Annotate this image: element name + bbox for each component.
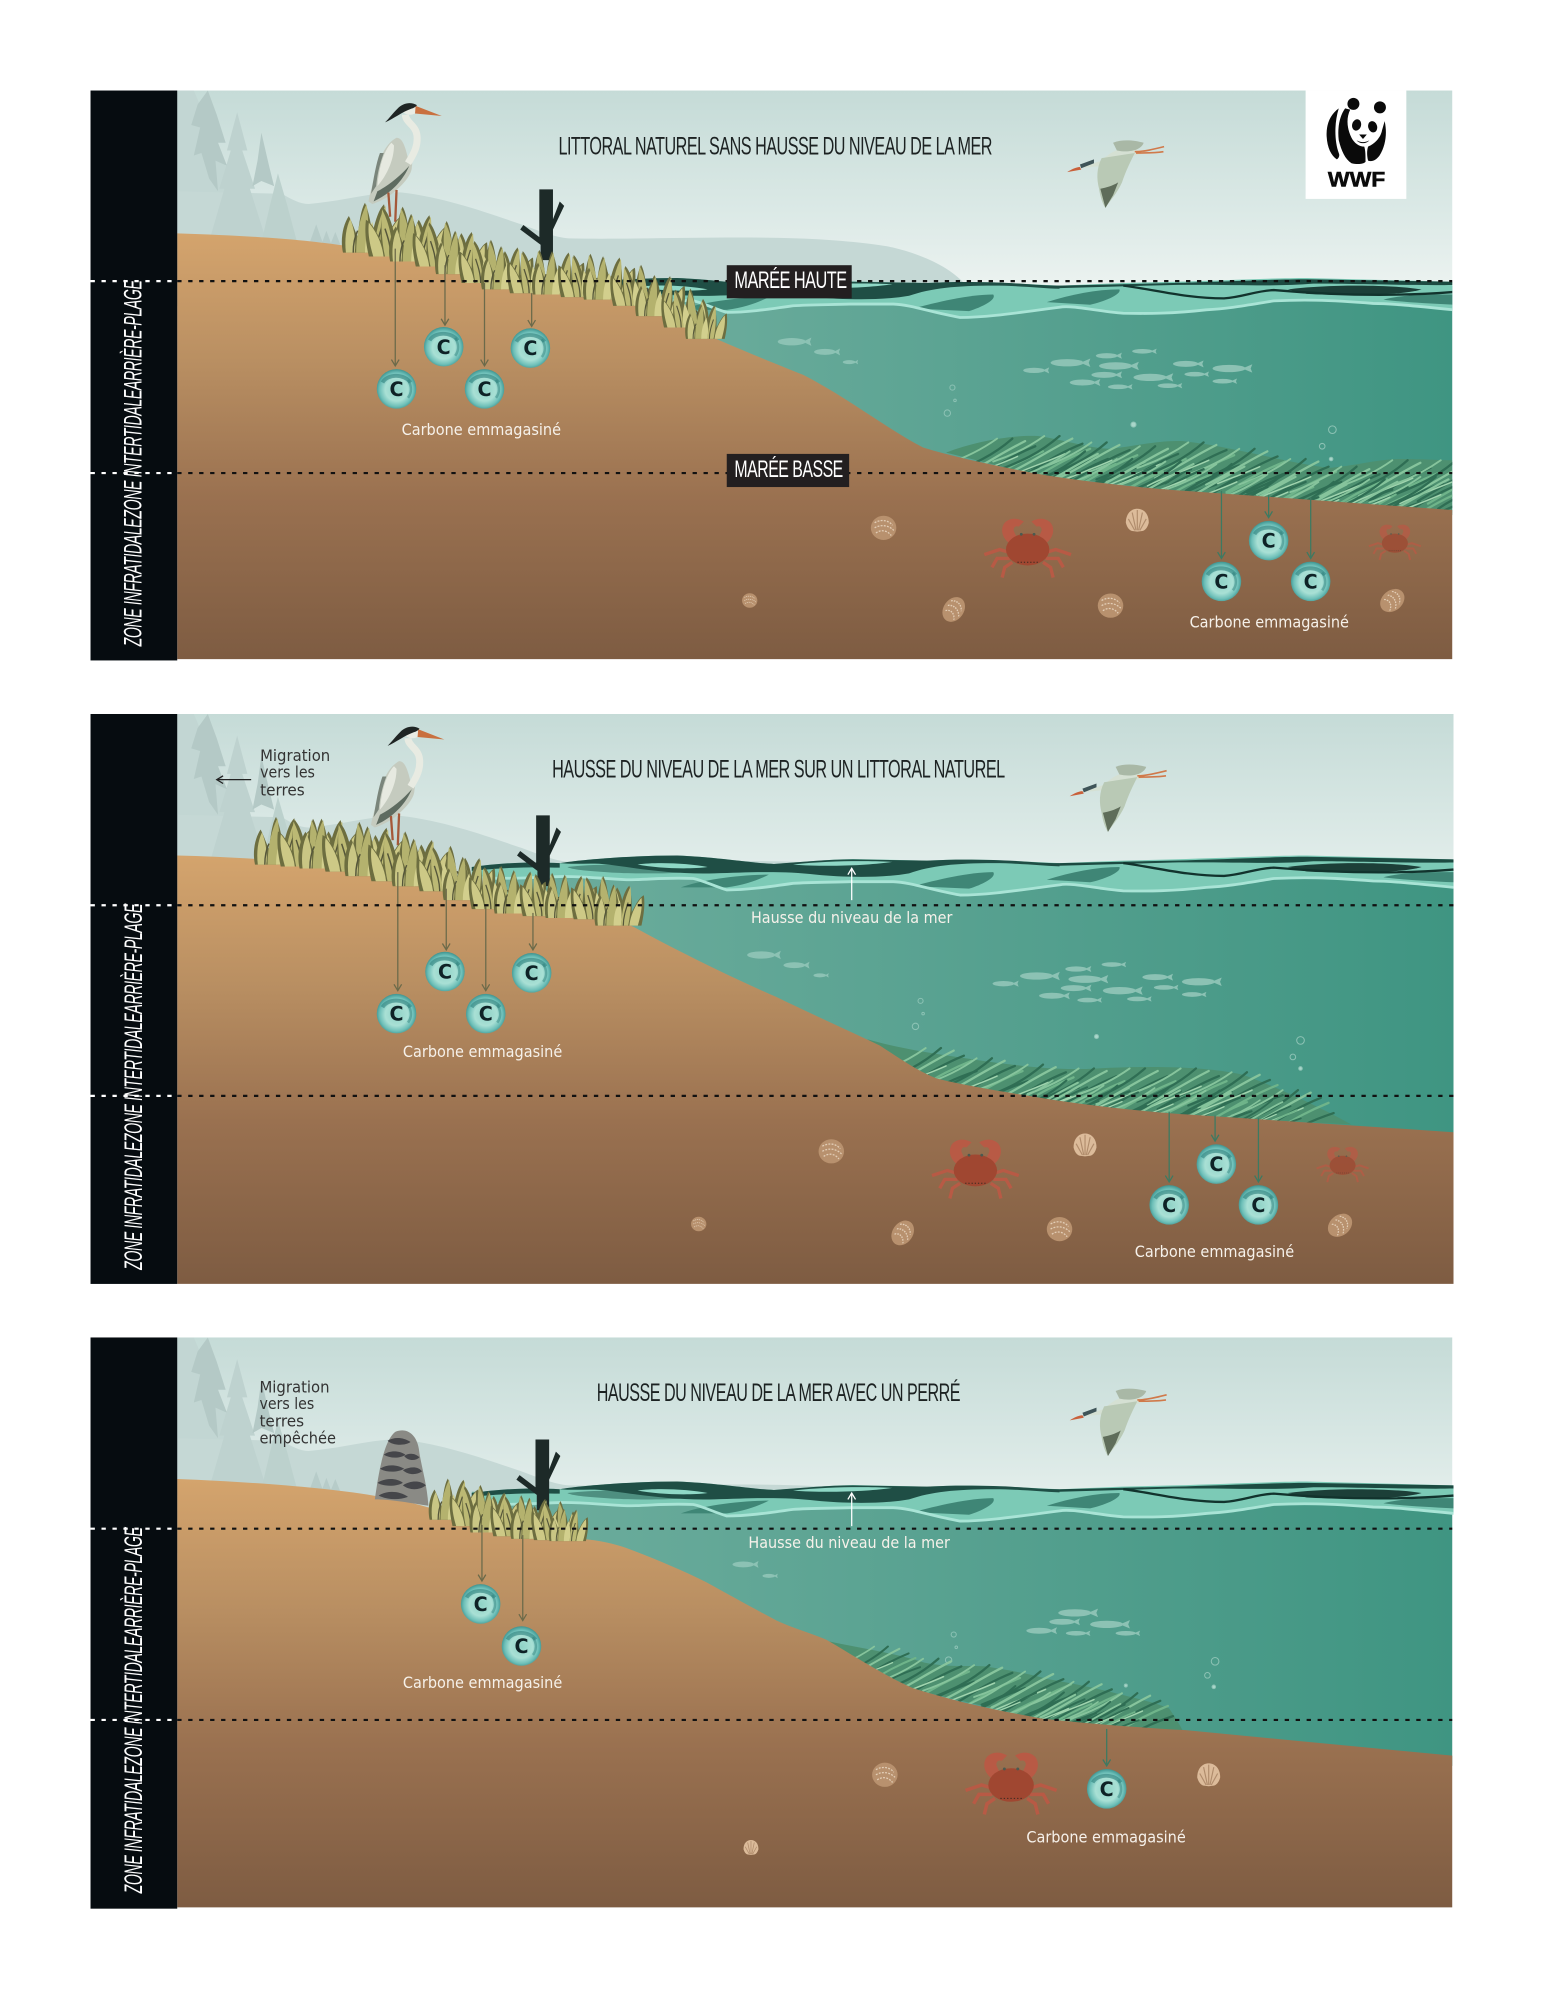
stored carbon: upper shore: C (523, 337, 537, 360)
sea creatures and shells (691, 1133, 1369, 1250)
blocked migration note: vers les (259, 1394, 314, 1413)
zone column (91, 91, 177, 660)
stored carbon: upper shore: C (474, 1593, 488, 1616)
stored carbon: upper shore: Carbone emmagasiné (402, 420, 561, 439)
zone column (91, 1337, 177, 1909)
seagrass (867, 1039, 1352, 1139)
marsh grass (429, 1479, 588, 1541)
stored carbon: upper shore: Carbone emmagasiné (403, 1673, 562, 1692)
distant hills and trees (177, 91, 964, 306)
zone column: ZONE INFRATIDALEZONE INTERTIDALEARRIÈRE-PLAGE (119, 1527, 148, 1894)
sea level rise arrow and label: Hausse du niveau de la mer (748, 1533, 950, 1552)
panel: natural shoreline without sea level rise (91, 91, 1492, 660)
stored carbon: seabed: Carbone emmagasiné (1026, 1827, 1186, 1846)
wave band (472, 1482, 1454, 1521)
panel: sea level rise with a seawall (91, 1337, 1454, 1909)
stored carbon: seabed: Carbone emmagasiné (1190, 612, 1349, 631)
wave band (472, 856, 1454, 895)
water (612, 286, 1452, 515)
fish (747, 951, 1222, 1003)
bubbles (945, 1632, 1219, 1689)
stored carbon: seabed: C (1214, 570, 1228, 593)
migration note: Migration (260, 746, 330, 765)
seabed and shore ground (177, 1479, 1452, 1907)
water (472, 1492, 1452, 1766)
flying bird (1070, 764, 1167, 832)
heron (371, 727, 444, 845)
label: low tide (727, 454, 849, 487)
seabed and shore ground (177, 856, 1454, 1284)
stored carbon: upper shore: C (438, 961, 452, 984)
stored carbon: upper shore: C (525, 962, 539, 985)
wave band (622, 278, 1452, 319)
stored carbon: seabed: Carbone emmagasiné (1135, 1242, 1294, 1261)
stored carbon: seabed: C (1304, 570, 1318, 593)
stored carbon: upper shore (377, 872, 562, 1061)
panel: sea level rise on a natural shoreline (91, 714, 1454, 1284)
stored carbon: seabed (1135, 1112, 1294, 1261)
stored carbon: upper shore: C (477, 378, 492, 401)
seawall stones (375, 1430, 428, 1506)
marsh grass (342, 203, 727, 339)
distant hills and trees (177, 1337, 964, 1553)
sea level rise arrow and label: Hausse du niveau de la mer (751, 908, 953, 927)
stored carbon: seabed (1026, 1729, 1186, 1846)
zone column: ZONE INFRATIDALEZONE INTERTIDALEARRIÈRE-PLAGE (119, 280, 148, 647)
dead tree stump (520, 189, 564, 260)
label: low tide: MARÉE BASSE (734, 456, 843, 483)
sky (177, 1337, 1452, 1554)
blocked migration note: terres (259, 1412, 304, 1431)
water (485, 867, 1454, 1136)
blocked migration note: empêchée (259, 1428, 336, 1447)
bubbles (912, 998, 1304, 1070)
distant hills and trees (177, 714, 964, 929)
seagrass (821, 1640, 1183, 1742)
dead tree stump (516, 1439, 560, 1510)
stored carbon: upper shore: Carbone emmagasiné (403, 1042, 562, 1061)
stored carbon: upper shore: C (390, 1003, 404, 1026)
title: HAUSSE DU NIVEAU DE LA MER SUR UN LITTORAL NATUREL (552, 756, 1005, 784)
fish (778, 337, 1252, 390)
stored carbon: seabed: C (1100, 1778, 1114, 1801)
zone column (91, 714, 177, 1284)
stored carbon: seabed: C (1162, 1194, 1176, 1217)
stored carbon: upper shore: C (479, 1003, 493, 1026)
stored carbon: upper shore: C (514, 1635, 528, 1658)
WWF logo: WWF (1328, 169, 1385, 192)
zone column: ZONE INFRATIDALEZONE INTERTIDALEARRIÈRE-PLAGE (119, 903, 148, 1270)
stored carbon: upper shore: C (437, 336, 451, 359)
stored carbon: upper shore (403, 1525, 562, 1692)
dead tree stump (517, 815, 561, 886)
marsh grass (254, 817, 644, 926)
bubbles (944, 385, 1336, 461)
sea creatures and shells (744, 1753, 1220, 1855)
blocked migration note: Migration (259, 1377, 330, 1396)
heron (368, 103, 442, 222)
migration note: terres (260, 781, 305, 800)
label: high tide (727, 265, 852, 298)
sea creatures and shells (742, 509, 1421, 626)
label: high tide: MARÉE HAUTE (734, 267, 847, 294)
sky (177, 91, 1452, 307)
stored carbon: upper shore: C (390, 378, 404, 401)
seagrass (946, 435, 1452, 512)
migration note: vers les (260, 763, 315, 782)
migration note (217, 746, 330, 800)
title: LITTORAL NATUREL SANS HAUSSE DU NIVEAU DE LA MER (558, 132, 992, 160)
WWF logo (1306, 91, 1406, 199)
flying bird (1070, 1389, 1167, 1456)
sky (177, 714, 1454, 931)
seabed and shore ground (177, 233, 1452, 659)
stored carbon: seabed (1190, 491, 1349, 631)
blocked migration note (259, 1377, 336, 1447)
title: HAUSSE DU NIVEAU DE LA MER AVEC UN PERRÉ (597, 1378, 960, 1407)
stored carbon: upper shore (377, 249, 561, 439)
stored carbon: seabed: C (1251, 1194, 1265, 1217)
flying bird (1067, 140, 1164, 208)
fish (732, 1561, 1140, 1636)
stored carbon: seabed: C (1262, 530, 1276, 553)
stored carbon: seabed: C (1209, 1153, 1223, 1176)
